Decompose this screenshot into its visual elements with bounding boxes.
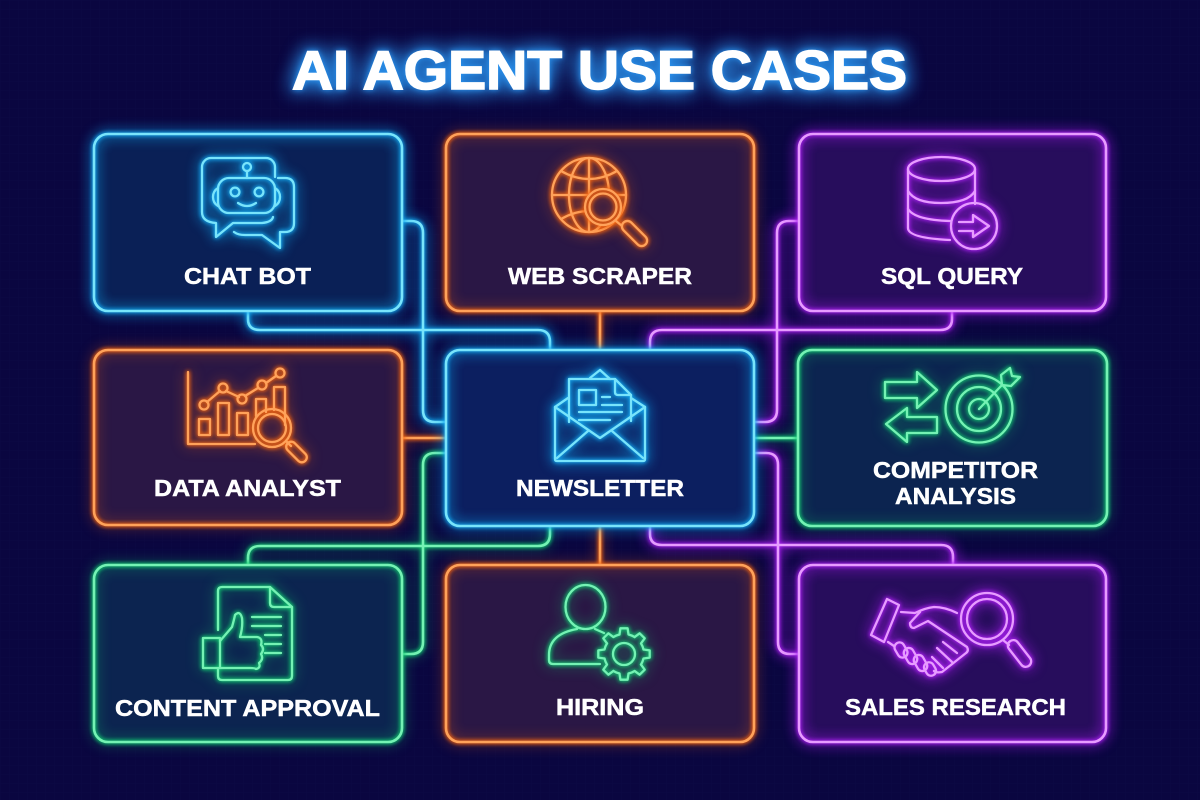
connectors: content approval to newsletter [248, 453, 550, 654]
icon: chat bot [202, 158, 294, 248]
label: web scraper: WEB SCRAPER [508, 263, 692, 289]
icon: globe with magnifier [552, 158, 649, 248]
panel: sales research [799, 565, 1106, 742]
connector: competitor analysis to newsletter [754, 437, 798, 439]
icon: person with gear [549, 585, 650, 680]
label: newsletter: NEWSLETTER [516, 475, 684, 501]
connectors: chat bot to newsletter [248, 221, 550, 422]
connectors: sql query to newsletter [650, 221, 952, 422]
icon: document with thumbs up [203, 587, 292, 680]
icon: chart with magnifier [188, 368, 309, 464]
panel: sql query [799, 134, 1106, 311]
label: content approval: CONTENT APPROVAL [115, 695, 380, 721]
panel: chat bot [94, 134, 402, 311]
panel: hiring [446, 565, 754, 742]
icon: handshake with magnifier [871, 593, 1033, 678]
panel: competitor analysis [798, 350, 1107, 526]
icon: arrows and target [885, 368, 1020, 442]
panel: newsletter [446, 350, 754, 526]
label: data analyst: DATA ANALYST [154, 475, 341, 501]
connectors: web scraper and hiring to newsletter [599, 311, 601, 565]
label: chat bot: CHAT BOT [184, 263, 311, 289]
label: sql query: SQL QUERY [881, 263, 1023, 289]
title: AI AGENT USE CASES [292, 40, 907, 101]
icon: envelope with letter [555, 370, 645, 461]
label: sales research: SALES RESEARCH [845, 694, 1066, 720]
label: hiring: HIRING [556, 694, 644, 720]
label: competitor analysis: ANALYSIS [895, 483, 1016, 509]
panel: content approval [94, 565, 402, 742]
label: competitor analysis [873, 457, 1038, 509]
connector: data analyst to newsletter [402, 437, 446, 439]
panel: data analyst [94, 350, 402, 525]
panel: web scraper [446, 134, 754, 311]
icon: database with arrow [908, 157, 997, 249]
label: competitor analysis: COMPETITOR [873, 457, 1038, 483]
connectors: sales research to newsletter [650, 453, 953, 654]
